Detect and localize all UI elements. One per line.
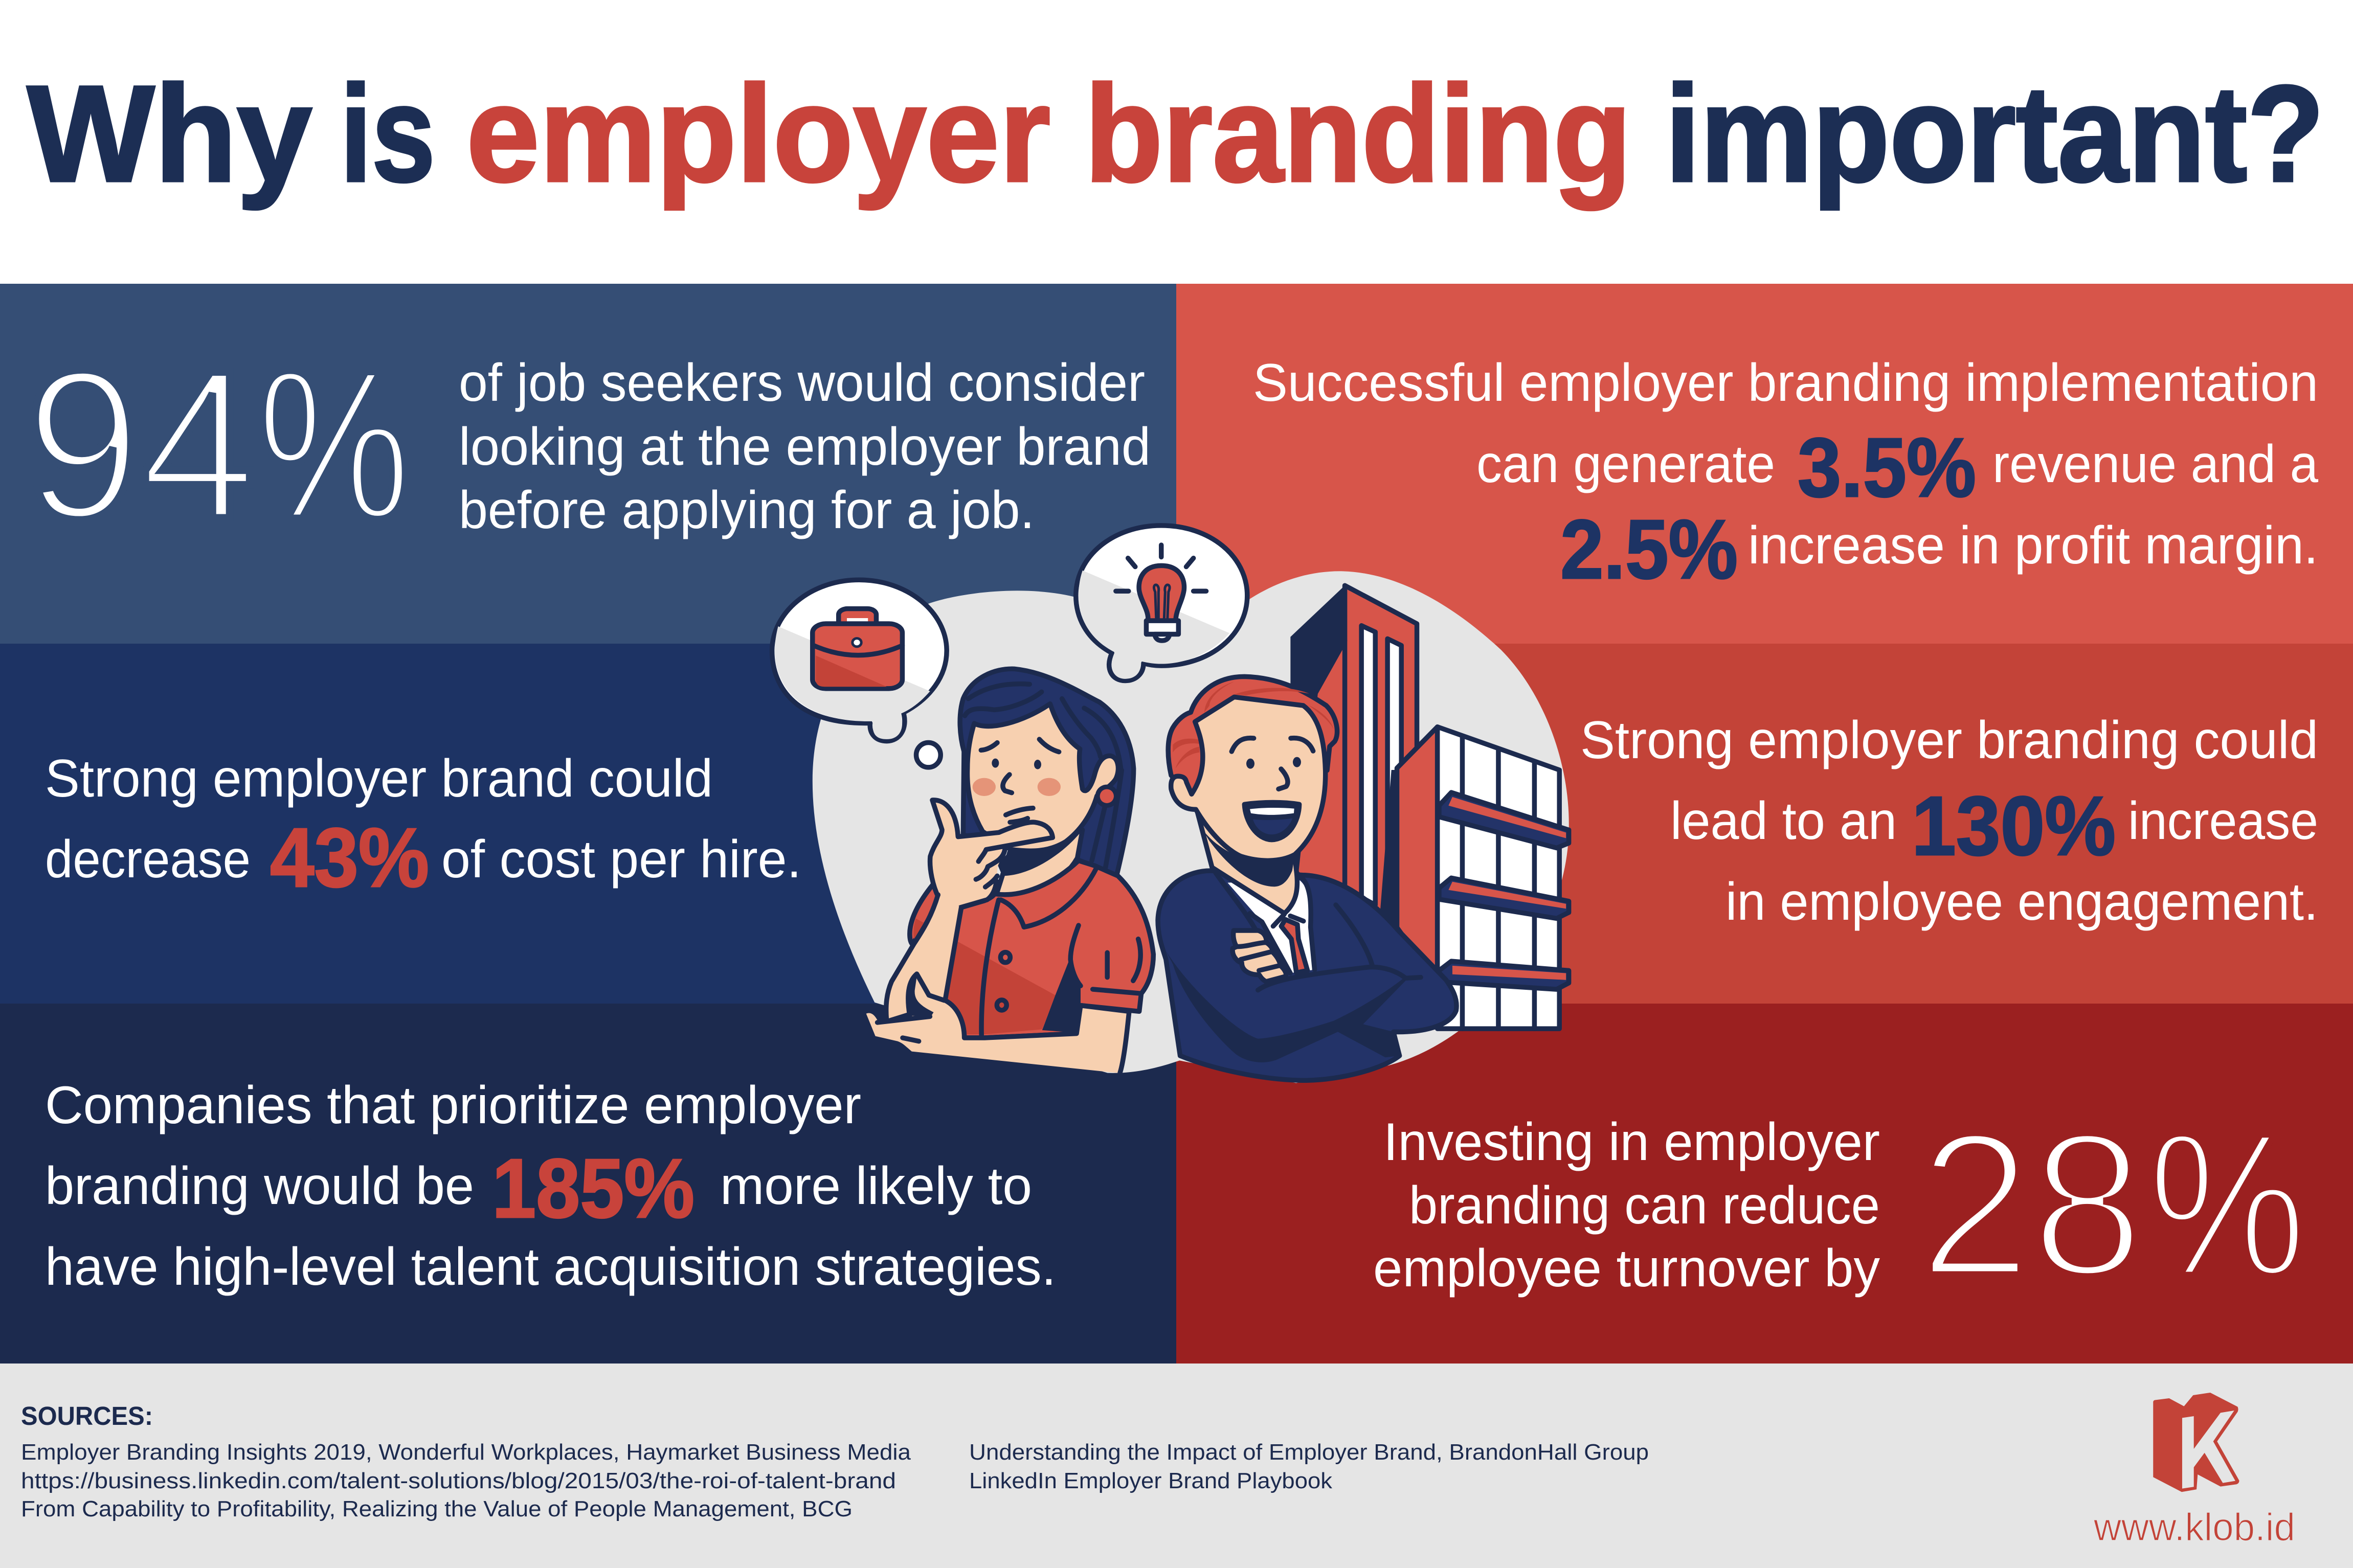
panel: 28% employee turnover: branding can reduce — [1409, 1176, 1880, 1235]
panel: 94% of job seekers: % — [257, 326, 411, 563]
panel: 3.5% revenue and 2.5% profit margin: increase in profit margin. — [1748, 516, 2318, 575]
panel: 94% of job seekers: looking at the employer brand — [459, 417, 1151, 476]
panel: 185% talent acquisition: more likely to — [720, 1156, 1032, 1216]
panel: 3.5% revenue and 2.5% profit margin — [1176, 284, 2353, 644]
panel: 94% of job seekers: of job seekers would consider — [459, 353, 1145, 413]
panel: 3.5% revenue and 2.5% profit margin: 3.5% — [1798, 421, 1976, 514]
woman: back sleeve — [910, 884, 939, 944]
logo: Klob K mark — [2153, 1393, 2239, 1492]
panel: 28% employee turnover: % — [2148, 1090, 2306, 1319]
title: is — [340, 57, 435, 210]
footer band with sources: LinkedIn Employer Brand Playbook — [969, 1468, 1333, 1493]
man: head, hair and neck — [1168, 676, 1337, 914]
panel: 28% employee turnover: 28 — [1919, 1090, 2144, 1319]
panel: 28% employee turnover: employee turnover by — [1373, 1239, 1880, 1298]
background blob — [813, 571, 1569, 1083]
panel: 94% of job seekers — [0, 284, 1176, 644]
panel: 3.5% revenue and 2.5% profit margin: can generate — [1476, 435, 1775, 494]
woman: forearms and lower hand — [865, 895, 1129, 1073]
panel: 43% cost per hire: decrease — [45, 830, 251, 889]
website url: www.klob.id — [2093, 1506, 2295, 1549]
footer band with sources: https://business.linkedin.com/talent-solutions/blog/2015/03/the-roi-of-talent-brand — [21, 1468, 896, 1493]
panel: 3.5% revenue and 2.5% profit margin: revenue and a — [1992, 435, 2318, 494]
woman: face, hair front and raised hand — [930, 684, 1122, 932]
panel: 94% of job seekers: 94 — [26, 326, 256, 563]
panel: 43% cost per hire — [0, 644, 1176, 1004]
title — [27, 57, 2324, 211]
panel: 3.5% revenue and 2.5% profit margin: 2.5% — [1560, 503, 1738, 596]
panel: 43% cost per hire: Strong employer brand could — [45, 749, 713, 808]
panel: 130% employee engagement: lead to an — [1670, 791, 1897, 851]
panel: 28% employee turnover — [1176, 1004, 2353, 1364]
footer band with sources: From Capability to Profitability, Realizing the Value of People Management, BCG — [21, 1496, 853, 1521]
office buildings — [1290, 585, 1569, 1029]
panel: 94% of job seekers: before applying for a job. — [459, 481, 1035, 540]
footer band with sources — [0, 1364, 2353, 1568]
illustration: thinking woman, smiling man and office buildings — [772, 526, 1569, 1083]
panel: 185% talent acquisition: have high-level talent acquisition strategies. — [45, 1237, 1056, 1297]
title: Why — [27, 57, 313, 211]
panel: 130% employee engagement — [1176, 644, 2353, 1004]
thought bubble: briefcase — [772, 580, 947, 741]
footer band with sources: Understanding the Impact of Employer Brand, BrandonHall Group — [969, 1440, 1649, 1465]
panel: 130% employee engagement: increase — [2128, 791, 2318, 851]
title: employer — [466, 57, 1050, 211]
panel: 185% talent acquisition: Companies that prioritize employer — [45, 1076, 861, 1135]
woman: blouse — [944, 860, 1153, 1038]
man: suit and folded arms — [1158, 871, 1456, 1080]
panel: 43% cost per hire: 43% — [270, 811, 429, 904]
small thought circle — [916, 743, 940, 767]
woman — [865, 669, 1153, 1073]
man — [1158, 676, 1456, 1080]
panel: 185% talent acquisition: branding would be — [45, 1156, 474, 1216]
panel: 130% employee engagement: in employee engagement. — [1725, 872, 2318, 931]
thought bubble: light bulb — [1076, 526, 1247, 680]
footer band with sources: Employer Branding Insights 2019, Wonderful Workplaces, Haymarket Business Media — [21, 1440, 911, 1465]
panel: 130% employee engagement: 130% — [1912, 779, 2116, 873]
panel: 43% cost per hire: of cost per hire. — [441, 830, 801, 889]
title: branding — [1085, 57, 1631, 211]
footer band with sources: SOURCES: — [21, 1401, 153, 1430]
panel: 130% employee engagement: Strong employer branding could — [1580, 711, 2318, 770]
woman: hair back and neck — [960, 669, 1134, 897]
panel: 28% employee turnover: Investing in employer — [1383, 1112, 1880, 1172]
panel: 3.5% revenue and 2.5% profit margin: Successful employer branding implementation — [1253, 353, 2318, 413]
panel: 185% talent acquisition: 185% — [492, 1142, 694, 1235]
panel: 185% talent acquisition — [0, 1004, 1176, 1364]
